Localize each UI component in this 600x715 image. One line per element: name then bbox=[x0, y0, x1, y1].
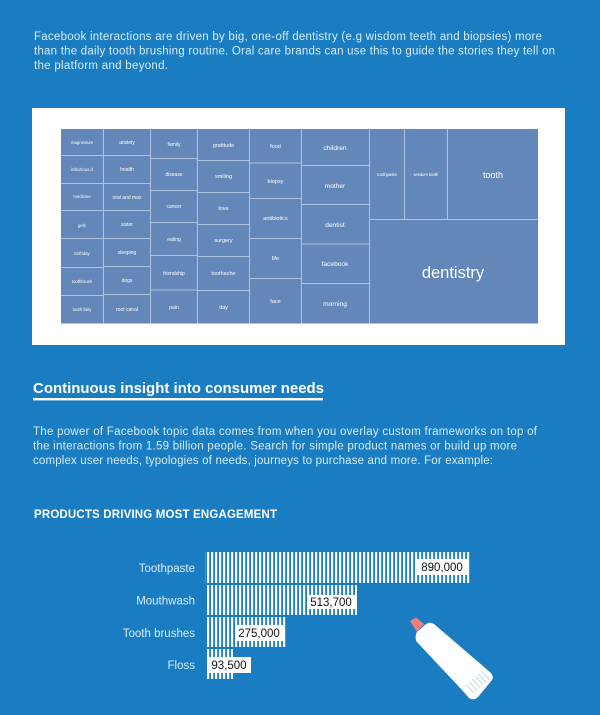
bar: mouthwash: 513,700 bbox=[310, 597, 352, 609]
panel: treemap: gels bbox=[78, 223, 86, 228]
bar: toothpaste: Toothpaste bbox=[139, 563, 195, 575]
bar: floss: Floss bbox=[168, 660, 195, 672]
bar: mouthwash bbox=[136, 585, 357, 615]
panel: treemap: magnesium bbox=[71, 140, 94, 145]
panel: treemap: health bbox=[120, 167, 134, 173]
bar: tooth brushes bbox=[123, 617, 287, 647]
body text bbox=[33, 426, 538, 467]
panel: treemap: medicine bbox=[73, 194, 91, 199]
panel: treemap: dogs bbox=[122, 278, 133, 284]
body text: complex user needs, typologies of needs, journeys to purchase and more. For example: bbox=[33, 455, 493, 467]
intro text: Facebook interactions are driven by big, one-off dentistry (e.g wisdom teeth and biopsies) more bbox=[34, 31, 542, 43]
bar: toothpaste bbox=[139, 552, 471, 583]
panel: treemap: smiling bbox=[215, 174, 232, 180]
panel: treemap: tooth bbox=[483, 170, 503, 180]
panel: treemap: day bbox=[219, 305, 228, 311]
panel: treemap: cancer bbox=[166, 204, 182, 210]
panel: treemap: toothbrush bbox=[72, 279, 93, 284]
body text: the interactions from 1.59 billion people. Search for simple product names or build up more bbox=[33, 440, 517, 452]
panel: treemap: biopsy bbox=[268, 179, 284, 185]
panel: treemap: eating bbox=[167, 237, 181, 243]
panel: treemap: gratitude bbox=[213, 143, 234, 149]
intro text: the platform and beyond. bbox=[34, 60, 168, 72]
panel: treemap: love bbox=[218, 206, 229, 212]
panel: treemap bbox=[32, 108, 565, 345]
panel: treemap: mother bbox=[325, 183, 346, 190]
panel: treemap: disease bbox=[165, 172, 183, 178]
panel: treemap: surgery bbox=[214, 238, 233, 244]
panel: treemap: life bbox=[272, 256, 279, 262]
panel: treemap: pain bbox=[169, 305, 179, 311]
panel: treemap: dentist bbox=[325, 222, 345, 229]
bar: tooth brushes: 275,000 bbox=[238, 628, 280, 640]
panel: treemap: toothache bbox=[211, 271, 236, 277]
bar: toothpaste: 890,000 bbox=[421, 562, 463, 574]
panel: treemap: birthday bbox=[74, 251, 90, 256]
panel: treemap: morning bbox=[323, 301, 347, 308]
panel: treemap: facebook bbox=[322, 261, 349, 268]
bar: mouthwash: Mouthwash bbox=[136, 596, 195, 608]
bar: floss: 93,500 bbox=[211, 660, 247, 672]
intro text bbox=[34, 31, 555, 72]
heading: continuous insight: Continuous insight into consumer needs bbox=[33, 380, 324, 397]
panel: treemap: sister bbox=[121, 222, 133, 228]
heading: products: PRODUCTS DRIVING MOST ENGAGEMENT bbox=[34, 509, 277, 521]
bar: floss bbox=[168, 649, 251, 679]
panel: treemap: face bbox=[270, 299, 281, 305]
panel: treemap: children bbox=[323, 145, 347, 152]
panel: treemap: food bbox=[270, 144, 281, 150]
panel: treemap: toothpaste bbox=[377, 172, 397, 177]
panel: treemap: dentistry bbox=[422, 264, 485, 282]
icon: toothpaste tube bbox=[410, 618, 493, 699]
panel: treemap: wisdom tooth bbox=[414, 172, 439, 177]
panel: treemap: oral and max bbox=[113, 195, 142, 201]
bar chart bbox=[123, 552, 471, 679]
panel: treemap: friendship bbox=[163, 271, 185, 277]
panel: treemap: root canal bbox=[116, 307, 138, 313]
panel: treemap: antibiotics bbox=[263, 216, 288, 222]
bar: tooth brushes: Tooth brushes bbox=[123, 628, 195, 640]
panel: treemap: family bbox=[167, 142, 181, 148]
panel: treemap: sleeping bbox=[118, 250, 137, 256]
panel: treemap: tooth fairy bbox=[73, 307, 92, 312]
body text: The power of Facebook topic data comes from when you overlay custom frameworks on top of bbox=[33, 426, 538, 438]
panel: treemap: anxiety bbox=[119, 140, 135, 146]
panel: treemap: infectious d bbox=[71, 167, 93, 172]
intro text: than the daily tooth brushing routine. Oral care brands can use this to guide the stories they tell on bbox=[34, 46, 555, 58]
